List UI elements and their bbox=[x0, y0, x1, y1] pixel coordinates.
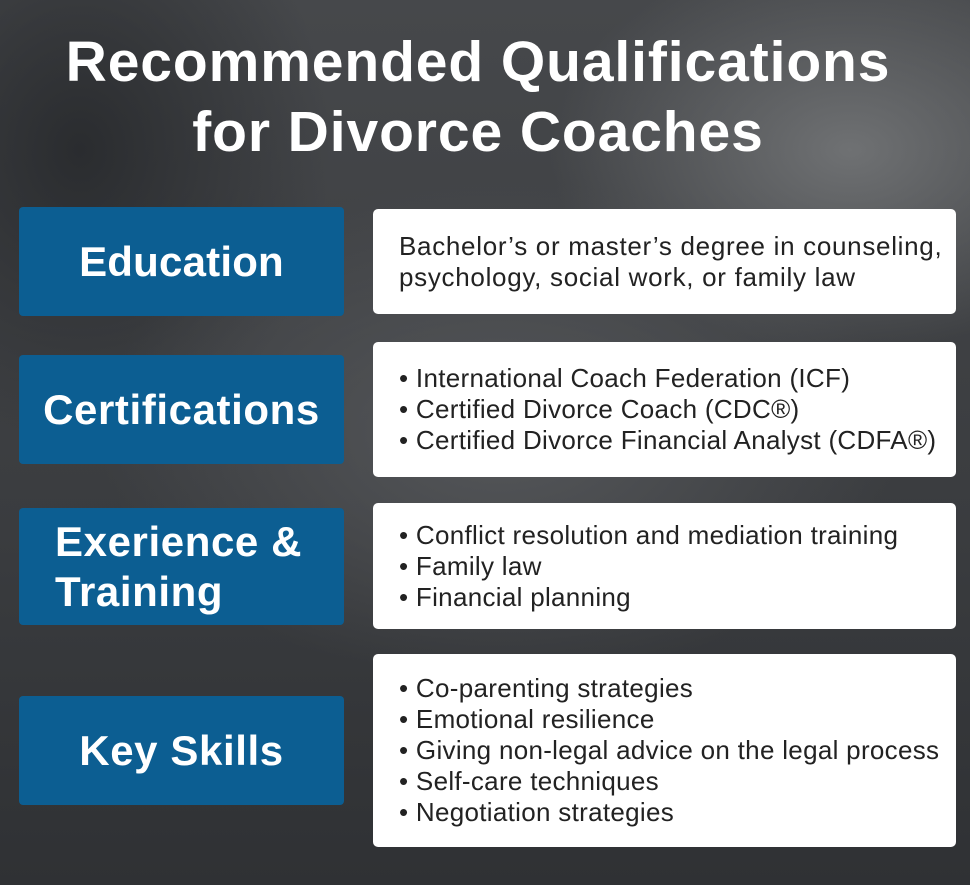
label: Certifications: Certifications bbox=[43, 386, 320, 432]
panel: key skills: • Self-care techniques bbox=[399, 766, 659, 796]
panel: education bbox=[373, 209, 956, 314]
panel: key skills: • Negotiation strategies bbox=[399, 797, 674, 827]
panel: certifications bbox=[373, 342, 956, 477]
panel: certifications: • International Coach Federation (ICF) bbox=[399, 363, 850, 393]
label: Key Skills bbox=[19, 696, 344, 805]
panel: key skills bbox=[373, 654, 956, 847]
panel: experience: • Financial planning bbox=[399, 582, 631, 612]
title: Recommended Qualifications bbox=[66, 30, 890, 94]
label: Key Skills: Key Skills bbox=[79, 726, 284, 774]
panel: certifications: • Certified Divorce Coach (CDC®) bbox=[399, 394, 800, 424]
label: Experience & Training: Training bbox=[55, 568, 223, 614]
panel: key skills: • Giving non-legal advice on the legal process bbox=[399, 735, 939, 765]
label: Experience & Training bbox=[19, 508, 344, 625]
panel: experience bbox=[373, 503, 956, 629]
panel: education: Bachelor’s or master’s degree in counseling, bbox=[399, 230, 942, 260]
panel: experience: • Family law bbox=[399, 550, 542, 580]
panel: education: psychology, social work, or family law bbox=[399, 262, 856, 292]
title bbox=[66, 30, 890, 164]
label: Education: Education bbox=[79, 238, 284, 284]
panel: key skills: • Co-parenting strategies bbox=[399, 673, 693, 703]
panel: certifications: • Certified Divorce Financial Analyst (CDFA®) bbox=[399, 425, 936, 455]
panel: key skills: • Emotional resilience bbox=[399, 704, 655, 734]
label: Education bbox=[19, 207, 344, 316]
panel: experience: • Conflict resolution and mediation training bbox=[399, 520, 898, 550]
label: Experience & Training: Exerience & bbox=[55, 518, 302, 564]
label: Certifications bbox=[19, 355, 344, 464]
title: for Divorce Coaches bbox=[192, 100, 764, 164]
